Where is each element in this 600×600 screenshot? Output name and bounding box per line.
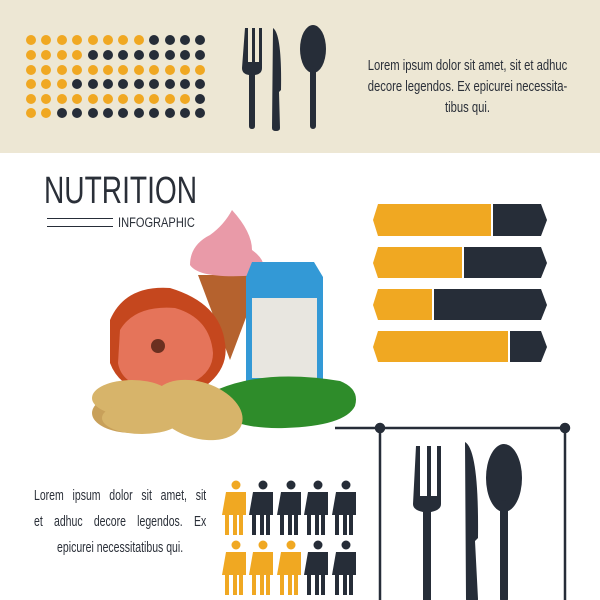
icon: top cutlery — [242, 25, 326, 131]
top text block: Lorem ipsum dolor sit amet, sit et adhuc — [368, 57, 567, 74]
bottom text block — [34, 487, 206, 556]
top text block — [368, 57, 567, 116]
food illustration — [92, 210, 356, 451]
top text block: tibus qui. — [445, 99, 490, 116]
dot matrix chart — [26, 35, 205, 118]
people chart — [222, 480, 356, 595]
bottom text block: Lorem ipsum dolor sit amet, sit — [34, 487, 206, 504]
icon: bottom cutlery — [413, 442, 522, 600]
bottom text block: epicurei necessitatibus qui. — [57, 539, 183, 556]
bar chart — [373, 204, 547, 362]
top text block: decore legendos. Ex epicurei necessita- — [368, 78, 567, 95]
title: NUTRITION — [44, 170, 197, 212]
top band — [0, 0, 600, 153]
title: INFOGRAPHIC — [118, 215, 195, 230]
connector frame — [335, 424, 569, 600]
bottom text block: et adhuc decore legendos. Ex — [34, 513, 206, 530]
